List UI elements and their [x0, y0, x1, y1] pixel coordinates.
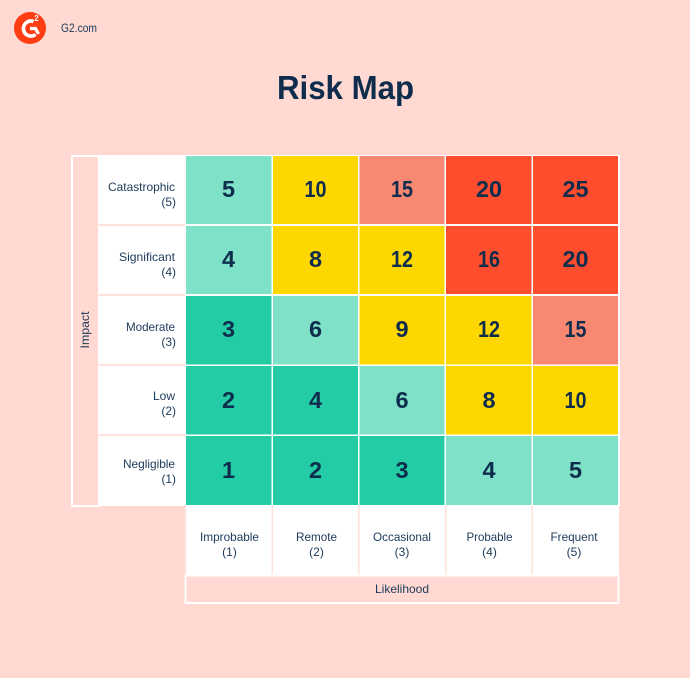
heat map cells — [185, 155, 620, 506]
cell values: 16 — [478, 246, 500, 272]
cell values: 10 — [564, 387, 586, 413]
cell values: 20 — [562, 246, 588, 272]
likelihood labels: (1) — [222, 545, 237, 559]
cell values: 4 — [222, 246, 235, 272]
impact labels: Catastrophic — [108, 180, 175, 194]
cell values: 4 — [482, 457, 496, 483]
cell values: 2 — [222, 387, 235, 413]
risk map matrix — [72, 155, 620, 603]
cell values: 10 — [304, 176, 326, 202]
cell values: 4 — [309, 387, 322, 413]
likelihood labels: (4) — [482, 545, 497, 559]
cell values: 1 — [222, 457, 235, 483]
cell values: 12 — [478, 316, 500, 342]
likelihood labels — [184, 505, 619, 576]
cell values: 5 — [222, 176, 235, 202]
likelihood labels: (5) — [567, 545, 581, 559]
impact labels: Moderate — [126, 320, 175, 334]
impact labels: (3) — [161, 335, 176, 349]
impact axis panel: Impact — [78, 311, 92, 348]
cell values: 6 — [395, 387, 409, 413]
impact labels — [99, 155, 186, 506]
likelihood labels: Frequent — [550, 530, 598, 544]
cell values: 8 — [482, 387, 496, 413]
likelihood labels: (3) — [395, 545, 409, 559]
cell values: 2 — [309, 457, 322, 483]
likelihood labels: Probable — [466, 530, 513, 544]
icon: G2 logo: 2 — [34, 14, 39, 23]
cell values: 6 — [309, 316, 322, 342]
likelihood labels: Occasional — [373, 530, 431, 544]
cell values: 3 — [395, 457, 409, 483]
cell values: 8 — [309, 246, 322, 272]
icon: G2 logo — [14, 12, 46, 44]
likelihood labels: Remote — [296, 530, 337, 544]
cell values: 12 — [391, 246, 413, 272]
impact labels: Low — [153, 389, 175, 403]
logo text: G2.com — [61, 21, 97, 35]
impact labels: (5) — [161, 195, 176, 209]
impact labels: (4) — [161, 265, 176, 279]
cell values: 25 — [562, 176, 588, 202]
impact labels: Significant — [119, 250, 176, 264]
impact axis panel — [72, 156, 99, 506]
cell values: 3 — [222, 316, 235, 342]
likelihood axis panel: Likelihood — [375, 582, 429, 596]
likelihood labels: Improbable — [200, 530, 259, 544]
impact labels: (1) — [161, 472, 176, 486]
cell values: 5 — [569, 457, 582, 483]
title: Risk Map — [277, 69, 414, 106]
cell values: 20 — [476, 176, 502, 202]
cell values: 15 — [391, 176, 413, 202]
cell values: 9 — [395, 316, 409, 342]
cell values — [222, 176, 588, 483]
likelihood labels: (2) — [309, 545, 324, 559]
cell values: 15 — [564, 316, 586, 342]
likelihood axis panel — [186, 576, 618, 603]
impact labels: Negligible — [123, 457, 175, 471]
impact labels: (2) — [161, 404, 176, 418]
